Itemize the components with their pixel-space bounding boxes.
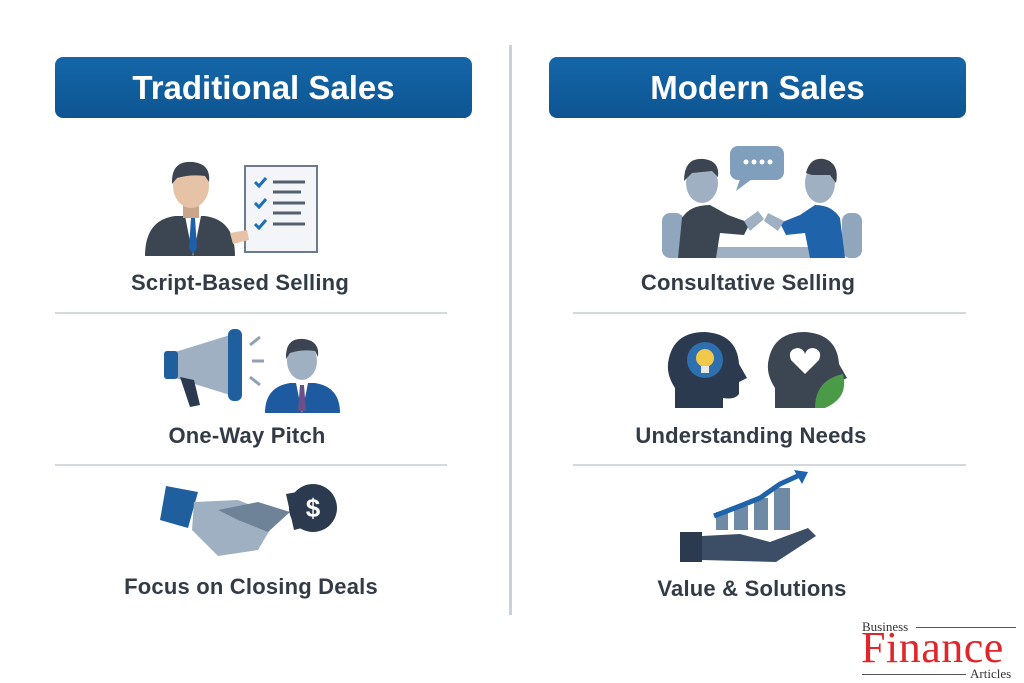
icon: heads with lightbulb and heart: [668, 332, 847, 408]
icon: handshake with dollar: $: [306, 493, 321, 523]
logo: Business Finance Articles: Business: [862, 619, 908, 634]
divider: vertical: [509, 45, 512, 615]
heading: Traditional Sales: [55, 57, 472, 118]
label: One-Way Pitch: One-Way Pitch: [168, 423, 326, 448]
logo: Business Finance Articles: Finance: [861, 623, 1004, 672]
heading: Traditional Sales: Traditional Sales: [132, 69, 395, 106]
label: Consultative Selling: Consultative Selling: [641, 270, 855, 295]
heading: Modern Sales: [549, 57, 966, 118]
icon: megaphone and person: [164, 329, 340, 413]
heading: Modern Sales: Modern Sales: [650, 69, 865, 106]
logo: Business Finance Articles: Articles: [970, 666, 1011, 681]
icon: consultative conversation: [662, 146, 862, 258]
label: Script-Based Selling: Script-Based Selling: [131, 270, 349, 295]
icon: hand with growth chart: [680, 470, 816, 562]
icon: handshake with dollar: [160, 484, 337, 556]
label: Value & Solutions: Value & Solutions: [657, 576, 847, 601]
label: Understanding Needs: Understanding Needs: [635, 423, 867, 448]
label: Focus on Closing Deals: Focus on Closing Deals: [124, 574, 378, 599]
icon: salesperson with checklist: [145, 162, 318, 256]
